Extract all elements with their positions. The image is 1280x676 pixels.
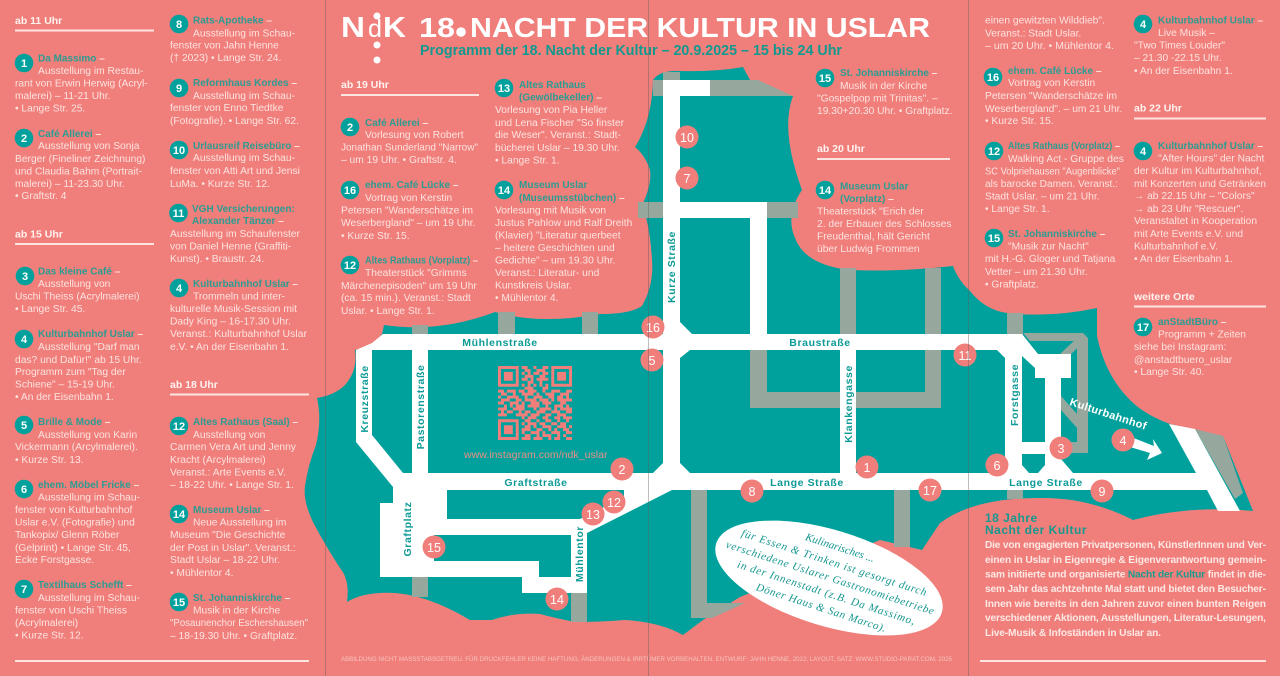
entry 4 After Hours: "After Hours" der Nacht bbox=[1158, 154, 1265, 164]
entry 12 Saal bbox=[170, 417, 298, 491]
entry 4 session: Veranst.: Kulturbahnhof Uslar bbox=[170, 329, 308, 340]
entry 4 Live Musik bbox=[1134, 15, 1263, 77]
entry 14 Museumsstübchen: (Museumsstübchen) – bbox=[519, 193, 625, 204]
entry 13: und Lena Fischer "So finster bbox=[495, 118, 625, 129]
map markers: 2 bbox=[619, 463, 626, 477]
entry 12 Saal: Ausstellung von bbox=[193, 430, 266, 441]
entry 1 bbox=[15, 54, 148, 114]
entry 15 Posaunenchor: "Posaunenchor Eschershausen" bbox=[170, 618, 308, 629]
street labels: Kurze Straße bbox=[666, 231, 678, 303]
entry 14 Museumsstübchen: Justus Pahlow und Ralf Dreith bbox=[495, 218, 633, 229]
entry 4: Schiene" – 15-19 Uhr. bbox=[15, 380, 115, 390]
entry 7: Textilhaus Schefft – bbox=[38, 580, 132, 591]
entry 14 Theaterstück: (Vorplatz) – bbox=[840, 194, 894, 205]
entry 15 Posaunenchor bbox=[170, 593, 308, 642]
entry 17: • Lange Str. 40. bbox=[1134, 367, 1204, 378]
logo: NdK: K bbox=[383, 12, 406, 44]
entry 14 Museumsstübchen: (Klavier) "Literatur querbeet bbox=[495, 230, 621, 242]
entry 5: Ausstellung von Karin bbox=[38, 430, 137, 441]
entry 13: Altes Rathaus bbox=[519, 80, 586, 91]
map markers bbox=[422, 126, 1134, 610]
entry 5 bbox=[15, 416, 138, 466]
entry 14 Theaterstück: 2. der Erbauer des Schlosses bbox=[817, 219, 951, 230]
entry 16: Petersen "Wanderschätze im bbox=[341, 206, 473, 216]
entry 14 Theaterstück bbox=[816, 181, 951, 255]
logo: NdK: N bbox=[341, 12, 365, 44]
entry 2 Narrow bbox=[341, 118, 478, 166]
entry 15 Musik zur Nacht: "Musik zur Nacht" bbox=[1008, 242, 1089, 252]
entry 15 Posaunenchor: St. Johanniskirche – bbox=[193, 593, 291, 604]
entry 12 Walking Act: als barocke Damen. Veranst.: bbox=[985, 179, 1118, 190]
entry 4 session: Dady King – 16-17.30 Uhr. bbox=[170, 316, 291, 328]
entry 4 After Hours: mit Arte Events e.V. und bbox=[1134, 229, 1243, 240]
entry 17: 17 bbox=[1137, 322, 1149, 334]
callout: Kulinarisches: in der Innenstadt (z.B. Da Massimo, bbox=[736, 559, 916, 628]
entry 4 Live Musik: • An der Eisenbahn 1. bbox=[1134, 66, 1233, 77]
entry 15 Musik zur Nacht: St. Johanniskirche – bbox=[1008, 229, 1106, 240]
entry 14 Theaterstück: Theaterstück "Erich der bbox=[817, 206, 924, 218]
street labels: Mühlenstraße bbox=[462, 337, 538, 349]
entry 14 Theaterstück: über Ludwig Frommen bbox=[817, 244, 920, 255]
entry 4 Live Musik: Kulturbahnhof Uslar – bbox=[1158, 16, 1263, 26]
entry 13: bücherei Uslar – 19.30 Uhr. bbox=[495, 143, 620, 154]
section: ab 18 Uhr: ab 18 Uhr bbox=[170, 379, 218, 391]
entry 14 continued bbox=[985, 16, 1114, 52]
map markers: 12 bbox=[607, 496, 621, 510]
entry 7 bbox=[15, 580, 140, 642]
entry 3: Das kleine Café – bbox=[38, 266, 121, 278]
subtitle: Programm der 18. Nacht der Kultur – 20.9.2025 – 15 bis 24 Uhr bbox=[420, 43, 842, 59]
section: ab 15 Uhr: ab 15 Uhr bbox=[15, 228, 63, 240]
entry 12 Theater: (ca. 15 min.). Veranst.: Stadt bbox=[341, 293, 471, 304]
street labels bbox=[359, 231, 1083, 582]
entry 9: 9 bbox=[176, 83, 182, 95]
entry 2 Narrow: 2 bbox=[347, 122, 353, 134]
entry 5: Vickermann (Arcylmalerei). bbox=[15, 442, 138, 453]
entry 6: (Gelprint) • Lange Str. 45, bbox=[15, 543, 131, 554]
entry 14 Theaterstück: 14 bbox=[819, 185, 832, 197]
entry 4 Live Musik: Live Musik – bbox=[1158, 28, 1215, 39]
about: 18 Jahre Nacht der Kultur: Live-Musik & Infoständen in Uslar an. bbox=[985, 628, 1161, 639]
entry 13 bbox=[495, 79, 625, 166]
entry 8 bbox=[170, 15, 295, 64]
entry 16 Vortrag 21: Petersen "Wanderschätze im bbox=[985, 91, 1117, 102]
entry 14 continued: Veranst.: Stadt Uslar. bbox=[985, 28, 1081, 40]
entry 12 Walking Act bbox=[985, 141, 1124, 215]
entry 13: 13 bbox=[498, 83, 510, 95]
entry 14 Museum: Neue Ausstellung im bbox=[193, 518, 286, 528]
entry 1: • Lange Str. 25. bbox=[15, 104, 85, 114]
entry 12 Theater: Theaterstück "Grimms bbox=[365, 268, 467, 279]
about: 18 Jahre Nacht der Kultur: sam initiierte und organisierte Nacht der Kultur findet in die- bbox=[985, 570, 1266, 580]
entry 14 Museumsstübchen: Veranst.: Literatur- und bbox=[495, 268, 600, 279]
entry 14 Museumsstübchen: 14 bbox=[498, 185, 511, 197]
entry 14 Museumsstübchen: Museum Uslar bbox=[519, 180, 587, 191]
entry 4 After Hours: → ab 23 Uhr "Rescuer". bbox=[1134, 204, 1243, 215]
entry 16: 16 bbox=[344, 185, 356, 197]
entry 15 Musik zur Nacht: 15 bbox=[988, 233, 1000, 245]
map markers: 11 bbox=[959, 349, 972, 363]
map markers: 3 bbox=[1058, 442, 1065, 456]
entry 2: • Graftstr. 4 bbox=[15, 191, 67, 202]
bottom rule left bbox=[15, 660, 309, 662]
map markers: 7 bbox=[684, 172, 691, 186]
entry 10: LuMa. • Kurze Str. 12. bbox=[170, 179, 270, 190]
about: 18 Jahre Nacht der Kultur: sem Jahr das achtzehnte Mal statt und bietet den Besucher- bbox=[985, 584, 1266, 595]
grey side lanes bbox=[412, 72, 1243, 622]
callout: Kulinarisches: für Essen & Trinken ist gesorgt durch bbox=[740, 527, 929, 599]
entry 4 After Hours: mit Konzerten und Getränken bbox=[1134, 179, 1266, 190]
entry 2: Café Allerei – bbox=[38, 129, 101, 140]
entry 4 After Hours: Kulturbahnhof Uslar – bbox=[1158, 141, 1263, 152]
entry 2 Narrow: Café Allerei – bbox=[365, 118, 428, 129]
entry 4: Ausstellung "Darf man bbox=[38, 342, 140, 353]
entry 4: das? und Dafür!" ab 15 Uhr. bbox=[15, 355, 142, 366]
entry 12 Theater bbox=[341, 256, 478, 317]
entry 9: fenster von Enno Tiedtke bbox=[170, 103, 284, 114]
section: ab 22 Uhr bbox=[1134, 102, 1266, 120]
map markers: 4 bbox=[1120, 434, 1127, 448]
entry 13: • Lange Str. 1. bbox=[495, 156, 560, 166]
entry 4 Live Musik: – 21.30 -22.15 Uhr. bbox=[1134, 53, 1222, 64]
entry 12 Walking Act: Walking Act - Gruppe des bbox=[1008, 154, 1124, 165]
entry 15 Gospelpop: 15 bbox=[819, 73, 831, 85]
entry 2 Narrow: – um 19 Uhr. • Graftstr. 4. bbox=[341, 155, 457, 166]
entry 7: • Kurze Str. 12. bbox=[15, 630, 84, 642]
street labels: Graftplatz bbox=[402, 501, 414, 557]
entry 4 After Hours bbox=[1134, 141, 1266, 265]
entry 12 Walking Act: Altes Rathaus (Vorplatz) – bbox=[1008, 141, 1120, 152]
entry 14 Museum: • Mühlentor 4. bbox=[170, 568, 233, 579]
entry 14 continued: einen gewitzten Wilddieb". bbox=[985, 16, 1105, 26]
street labels: Klankengasse bbox=[843, 365, 855, 443]
entry 4 session: Trommeln und inter- bbox=[193, 292, 285, 302]
section: ab 20 Uhr bbox=[817, 143, 950, 160]
entry 4 After Hours: Veranstaltet in Kooperation bbox=[1134, 216, 1257, 227]
white streets bbox=[356, 80, 1240, 593]
entry 14 Museum bbox=[170, 505, 296, 579]
entry 2: Ausstellung von Sonja bbox=[38, 141, 140, 152]
street labels: Lange Straße bbox=[1009, 477, 1083, 489]
entry 11 bbox=[169, 204, 300, 265]
entry 12 Theater: Märchenepisoden" um 19 Uhr bbox=[341, 281, 477, 292]
entry 14 Museum: Museum "Die Geschichte bbox=[170, 530, 286, 541]
entry 14 Museumsstübchen: • Mühlentor 4. bbox=[495, 293, 558, 304]
about: 18 Jahre Nacht der Kultur: Die von engagierten Privatpersonen, KünstlerInnen und Ver- bbox=[985, 540, 1266, 551]
entry 7: Ausstellung im Schau- bbox=[38, 593, 140, 604]
entry 10: Ausstellung im Schau- bbox=[193, 153, 295, 164]
entry 8: Ausstellung im Schau- bbox=[193, 28, 295, 40]
about: 18 Jahre Nacht der Kultur: verschiedener Aktionen, Ausstellungen, Literatur-Lesungen, bbox=[985, 613, 1266, 624]
callout: Kulinarisches: Döner Haus & San Marco). bbox=[753, 581, 887, 635]
entry 4: 4 bbox=[21, 334, 28, 346]
entry 12 Saal: Altes Rathaus (Saal) – bbox=[193, 417, 298, 428]
entry 17: siehe bei Instagram: bbox=[1134, 342, 1226, 353]
entry 16: Weserbergland" – um 19 Uhr. bbox=[341, 218, 476, 229]
entry 3: Uschi Theiss (Acrylmalerei) bbox=[15, 292, 140, 302]
entry 15 Posaunenchor: 15 bbox=[173, 597, 185, 609]
entry 14 Museumsstübchen: Kunstkreis Uslar. bbox=[495, 280, 572, 292]
about: 18 Jahre Nacht der Kultur: einen in Uslar in Eigenregie & Eigenverantwortung gemein- bbox=[985, 555, 1266, 566]
entry 4 session: e.V. • An der Eisenbahn 1. bbox=[170, 342, 289, 353]
section: weitere Orte bbox=[1133, 291, 1266, 308]
entry 4 After Hours: • An der Eisenbahn 1. bbox=[1134, 254, 1233, 265]
entry 3: • Lange Str. 45. bbox=[15, 304, 85, 315]
entry 14 Museum: der Post in Uslar". Veranst.: bbox=[170, 543, 296, 554]
entry 14 Museumsstübchen: – heitere Geschichten und bbox=[495, 243, 615, 254]
street labels: Graftstraße bbox=[504, 477, 568, 489]
entry 4: • An der Eisenbahn 1. bbox=[15, 392, 114, 403]
entry 12 Walking Act: SC Volpriehausen "Augenblicke" bbox=[985, 166, 1120, 178]
entry 14 Museum: Museum Uslar – bbox=[193, 505, 270, 516]
entry 12 Saal: Kracht (Arcylmalerei) bbox=[170, 455, 266, 466]
entry 16 Vortrag 21: Vortrag von Kerstin bbox=[1008, 78, 1095, 89]
entry 1: 1 bbox=[21, 58, 27, 70]
map markers: 13 bbox=[586, 508, 600, 522]
entry 14 Museumsstübchen: Vorlesung mit Musik von bbox=[495, 206, 606, 216]
entry 3: Ausstellung von bbox=[38, 279, 111, 290]
entry 15 Gospelpop: "Gospelpop mit Trinitas". – bbox=[817, 94, 938, 104]
entry 6: fenster von Kulturbahnhof bbox=[15, 505, 133, 516]
entry 14 continued: – um 20 Uhr. • Mühlentor 4. bbox=[985, 41, 1114, 52]
street labels: Mühlentor bbox=[574, 526, 586, 582]
entry 6: Ausstellung im Schau- bbox=[38, 492, 140, 504]
section: ab 19 Uhr: ab 19 Uhr bbox=[341, 79, 389, 91]
entry 15 Musik zur Nacht: Vetter – um 21.30 Uhr. bbox=[985, 267, 1088, 278]
entry 12 Saal: 12 bbox=[173, 421, 185, 433]
entry 1: malerei) – 11-21 Uhr. bbox=[15, 91, 111, 102]
entry 11: 11 bbox=[173, 208, 184, 220]
entry 14 Museumsstübchen: Gedichte" – um 19.30 Uhr. bbox=[495, 256, 615, 266]
entry 12 Theater: Altes Rathaus (Vorplatz) – bbox=[365, 256, 478, 266]
entry 11: Alexander Tänzer – bbox=[192, 216, 284, 227]
entry 10: 10 bbox=[173, 145, 185, 157]
map markers: 14 bbox=[550, 593, 564, 607]
map markers: 9 bbox=[1099, 485, 1106, 499]
section: ab 11 Uhr bbox=[15, 15, 154, 32]
entry 14 Museum: Stadt Uslar – 18-22 Uhr. bbox=[170, 555, 280, 566]
entry 16: Vortrag von Kerstin bbox=[365, 193, 452, 204]
entry 15 Posaunenchor: – 18-19.30 Uhr. • Graftplatz. bbox=[170, 631, 297, 642]
title: NACHT DER KULTUR IN USLAR bbox=[470, 12, 930, 43]
entry 10: fenster von Atti Art und Jensi bbox=[170, 166, 300, 177]
entry 15 Posaunenchor: Musik in der Kirche bbox=[193, 606, 280, 616]
entry 1: Ausstellung im Restau- bbox=[38, 66, 143, 77]
entry 17: anStadtBüro – bbox=[1158, 317, 1227, 328]
entry 4 session bbox=[170, 279, 308, 353]
bottom rule right bbox=[980, 660, 1266, 662]
street labels: Pastorenstraße bbox=[415, 365, 427, 449]
entry 14 Museum: 14 bbox=[173, 509, 186, 521]
entry 4: Programm zum "Tag der bbox=[15, 367, 126, 378]
map bbox=[305, 67, 1253, 635]
entry 2: und Claudia Bahm (Portrait- bbox=[15, 166, 142, 178]
entry 4 session: 4 bbox=[176, 283, 183, 295]
entry 9: (Fotografie). • Lange Str. 62. bbox=[170, 116, 299, 127]
entry 4 session: kulturelle Musik-Session mit bbox=[170, 304, 297, 315]
entry 12 Saal: Veranst.: Arte Events e.V. bbox=[170, 468, 286, 478]
entry 15 Gospelpop: Musik in der Kirche bbox=[840, 81, 927, 92]
QR code bbox=[498, 366, 572, 440]
entry 6 bbox=[15, 480, 140, 566]
entry 11: von Daniel Henne (Graffiti- bbox=[170, 242, 291, 252]
entry 3 bbox=[15, 266, 140, 315]
logo: NdK bbox=[341, 12, 406, 64]
map markers: 8 bbox=[749, 485, 756, 499]
entry 9 bbox=[170, 78, 299, 127]
title: 18 bbox=[419, 12, 455, 43]
entry 17: Programm + Zeiten bbox=[1158, 330, 1246, 340]
entry 6: Tankopix/ Glenn Röber bbox=[15, 530, 120, 541]
street labels: Forstgasse bbox=[1009, 364, 1021, 426]
section: ab 18 Uhr bbox=[170, 379, 309, 396]
map markers: 6 bbox=[994, 459, 1001, 473]
entry 8: († 2023) • Lange Str. 24. bbox=[170, 53, 281, 64]
entry 16 bbox=[341, 180, 476, 242]
entry 10: Urlausreif Reisebüro – bbox=[193, 141, 300, 152]
entry 4: Kulturbahnhof Uslar – bbox=[38, 329, 143, 340]
section: ab 11 Uhr: ab 11 Uhr bbox=[15, 15, 62, 27]
footer note: ABBILDUNG NICHT MASSSTABSGETREU. FÜR DRUCKFEHLER KEINE HAFTUNG, ÄNDERUNGEN & IRRTÜMER VORBEHALTEN. ENTWURF: JAHN HENNE, 2022; LAYOUT, SATZ: WWW.STUDIO-PARAT.COM, 2025 bbox=[341, 656, 953, 663]
entry 12 Walking Act: 12 bbox=[988, 146, 1000, 158]
entry 4 After Hours: 4 bbox=[1140, 146, 1147, 158]
entry 7: 7 bbox=[21, 584, 27, 596]
street labels: Braustraße bbox=[789, 337, 851, 349]
entry 16: ehem. Café Lücke – bbox=[365, 180, 459, 191]
entry 6: 6 bbox=[21, 484, 27, 496]
arrow to Kulturbahnhof bbox=[1130, 437, 1162, 460]
entry 6: ehem. Möbel Fricke – bbox=[38, 480, 140, 491]
entry 16 Vortrag 21: Weserbergland". – um 21 Uhr. bbox=[985, 104, 1122, 115]
logo: NdK: d bbox=[368, 15, 382, 43]
entry 4 Live Musik: 4 bbox=[1140, 19, 1147, 31]
entry 6: Uslar e.V. (Fotografie) und bbox=[15, 518, 135, 528]
entry 14 Theaterstück: Freudenthal, hält Gericht bbox=[817, 232, 930, 242]
entry 8: Rats-Apotheke – bbox=[193, 16, 272, 26]
label: Kulturbahnhof: Kulturbahnhof bbox=[1068, 396, 1148, 433]
entry 15 Musik zur Nacht: mit H.-G. Gloger und Tatjana bbox=[985, 254, 1116, 265]
street labels: Kreuzstraße bbox=[359, 365, 371, 433]
section: ab 19 Uhr bbox=[341, 79, 479, 96]
entry 1: rant von Erwin Herwig (Acryl- bbox=[15, 78, 148, 90]
entry 12 Theater: 12 bbox=[344, 260, 356, 272]
map markers: 5 bbox=[649, 354, 656, 368]
entry 9: Reformhaus Kordes – bbox=[193, 78, 297, 89]
entry 16 Vortrag 21 bbox=[984, 66, 1122, 127]
map markers: 16 bbox=[646, 321, 660, 335]
entry 2: 2 bbox=[21, 133, 27, 145]
map markers: 15 bbox=[427, 541, 441, 555]
about: 18 Jahre Nacht der Kultur: Innen wie bereits in den Jahren zuvor einen bunten Reigen bbox=[985, 599, 1266, 610]
entry 4 session: Kulturbahnhof Uslar – bbox=[193, 279, 298, 290]
callout: Kulinarisches: verschiedene Uslarer Gastronomiebetriebe bbox=[724, 539, 936, 618]
entry 4 After Hours: der Kultur im Kulturbahnhof, bbox=[1134, 166, 1262, 177]
teal block at Graftplatz bbox=[434, 535, 571, 577]
entry 16 Vortrag 21: • Kurze Str. 15. bbox=[985, 116, 1054, 127]
entry 15 Gospelpop bbox=[816, 68, 952, 117]
entry 4 bbox=[15, 329, 143, 403]
entry 4 After Hours: Kulturbahnhof e.V. bbox=[1134, 242, 1218, 252]
entry 14 Museumsstübchen bbox=[495, 180, 633, 304]
entry 2 bbox=[15, 129, 145, 202]
entry 16 Vortrag 21: 16 bbox=[987, 72, 999, 84]
entry 4 Live Musik: "Two Times Louder" bbox=[1134, 40, 1225, 52]
entry 8: 8 bbox=[176, 19, 182, 31]
entry 4 After Hours: → ab 22.15 Uhr – "Colors" bbox=[1134, 191, 1255, 202]
section: ab 20 Uhr: ab 20 Uhr bbox=[817, 143, 865, 155]
entry 2: malerei) – 11-23.30 Uhr. bbox=[15, 179, 125, 190]
entry 14 Theaterstück: Museum Uslar bbox=[840, 182, 908, 192]
entry 13: die Weser". Veranst.: Stadt- bbox=[495, 130, 621, 141]
entry 13: Vorlesung von Pia Heller bbox=[495, 105, 608, 116]
entry 15 Musik zur Nacht bbox=[985, 229, 1116, 290]
entry 11: Ausstellung im Schaufenster bbox=[170, 229, 300, 240]
entry 2 Narrow: Jonathan Sunderland "Narrow" bbox=[341, 142, 478, 154]
entry 7: fenster von Uschi Theiss bbox=[15, 606, 127, 616]
entry 3: 3 bbox=[22, 271, 28, 283]
street labels: Lange Straße bbox=[770, 477, 844, 489]
entry 9: Ausstellung im Schau- bbox=[193, 91, 295, 102]
callout: Kulinarisches bbox=[702, 498, 956, 658]
about: 18 Jahre Nacht der Kultur bbox=[985, 511, 1266, 639]
entry 13: (Gewölbekeller) – bbox=[519, 92, 602, 104]
entry 11: VGH Versicherungen: bbox=[192, 204, 295, 215]
entry 2: Berger (Fineliner Zeichnung) bbox=[15, 154, 145, 165]
entry 11: Kunst). • Braustr. 24. bbox=[170, 254, 264, 265]
entry 7: (Acrylmalerei) bbox=[15, 618, 78, 629]
entry 12 Walking Act: • Lange Str. 1. bbox=[985, 204, 1050, 215]
entry 12 Saal: – 18-22 Uhr. • Lange Str. 1. bbox=[170, 480, 294, 491]
map markers: 17 bbox=[923, 484, 937, 498]
entry 5: • Kurze Str. 13. bbox=[15, 455, 84, 466]
entry 5: Brille & Mode – bbox=[38, 417, 111, 428]
entry 8: fenster von Jahn Henne bbox=[170, 40, 279, 52]
entry 15 Gospelpop: 19.30+20.30 Uhr. • Graftplatz. bbox=[817, 106, 952, 117]
entry 15 Musik zur Nacht: • Graftplatz. bbox=[985, 280, 1039, 290]
map markers: 10 bbox=[680, 131, 694, 145]
entry 12 Walking Act: Stadt Uslar. – um 21 Uhr. bbox=[985, 192, 1100, 202]
instagram link: www.instagram.com/ndk_uslar bbox=[463, 449, 608, 461]
about: 18 Jahre Nacht der Kultur: Nacht der Kultur bbox=[985, 523, 1087, 537]
entry 17 bbox=[1134, 317, 1246, 378]
entry 12 Theater: Uslar. • Lange Str. 1. bbox=[341, 306, 435, 317]
entry 6: Ecke Forstgasse. bbox=[15, 555, 94, 566]
map markers: 1 bbox=[864, 461, 871, 475]
section: weitere Orte: weitere Orte bbox=[1133, 291, 1195, 303]
entry 12 Saal: Carmen Vera Art und Jenny bbox=[170, 442, 297, 453]
about: 18 Jahre Nacht der Kultur: 18 Jahre bbox=[985, 511, 1038, 525]
entry 1: Da Massimo – bbox=[38, 54, 105, 64]
entry 10 bbox=[170, 141, 300, 190]
entry 15 Gospelpop: St. Johanniskirche – bbox=[840, 68, 938, 79]
entry 16: • Kurze Str. 15. bbox=[341, 231, 410, 242]
section: ab 15 Uhr bbox=[15, 228, 154, 245]
entry 17: @anstadtbuero_uslar bbox=[1134, 355, 1233, 366]
section: ab 22 Uhr: ab 22 Uhr bbox=[1134, 102, 1182, 114]
entry 5: 5 bbox=[21, 420, 27, 432]
map ground bbox=[305, 67, 1253, 635]
callout: Kulinarisches: Kulinarisches ... bbox=[803, 531, 876, 565]
entry 16 Vortrag 21: ehem. Café Lücke – bbox=[1008, 66, 1102, 77]
entry 2 Narrow: Vorlesung von Robert bbox=[365, 130, 464, 141]
